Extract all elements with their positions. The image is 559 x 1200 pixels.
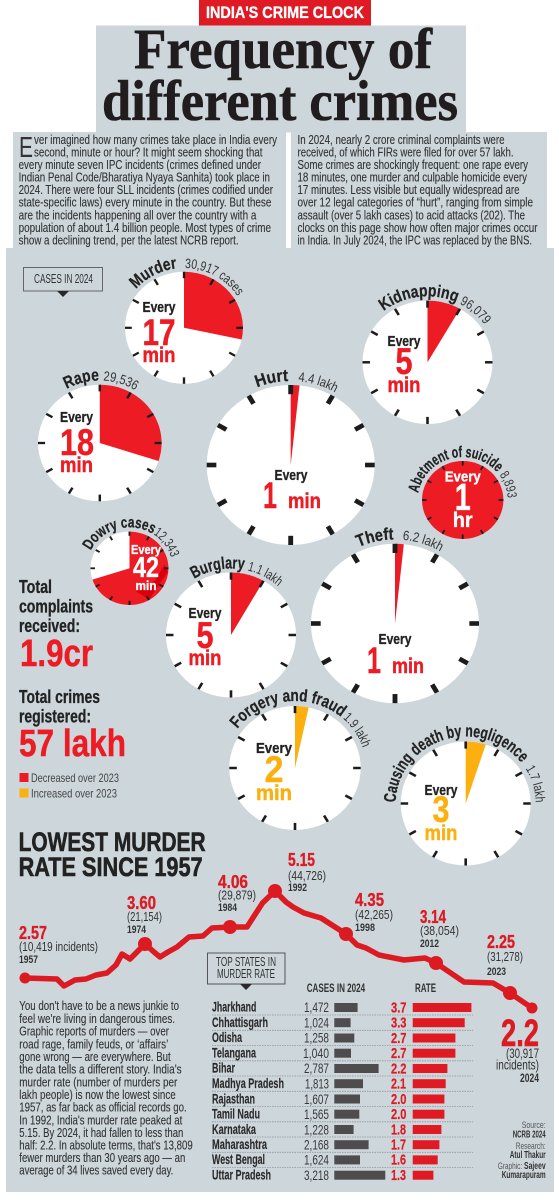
clock: forgery and fraud: Forgery and fraud [228, 689, 348, 728]
data label: 1992: 1992 [288, 882, 307, 894]
clock: causing death by negligence: Every [424, 782, 458, 799]
stat: total crimes registered: 57 lakh [19, 723, 126, 765]
legend [20, 771, 119, 800]
credits: Research: [516, 1141, 546, 1152]
row: Madhya Pradesh: 2.1 [391, 1076, 406, 1092]
clock: forgery and fraud: 1.9 lakh [343, 713, 370, 748]
clock: kidnapping: 96,079 [460, 296, 491, 324]
intro text left: E [19, 132, 33, 164]
row: Maharashtra: 1.7 [391, 1136, 406, 1154]
row: Madhya Pradesh [212, 1076, 446, 1092]
clock: dowry cases: Dowry cases [82, 518, 156, 550]
text block: murder rate story: Graphic reports of murders — over [19, 1024, 169, 1038]
legend: Decreased over 2023 [31, 771, 119, 785]
row: West Bengal [212, 1152, 438, 1169]
clock: kidnapping: min [388, 374, 420, 397]
clock: forgery and fraud: Every [256, 740, 293, 757]
title: Frequency of [134, 18, 433, 81]
intro text left: ver imagined how many crimes take place in India every [34, 132, 277, 147]
data label: 1974: 3.60 [127, 893, 156, 913]
clock: rape: 18 [60, 422, 94, 463]
text block: murder rate story: feel we're living in dangerous times. [19, 1011, 175, 1026]
intro text left: every minute seven IPC incidents (crimes defined under [19, 157, 262, 172]
row: Tamil Nadu [212, 1106, 444, 1123]
text block: murder rate story: road rage, family feuds, or ‘affairs’ [19, 1036, 168, 1051]
clock: theft: min [392, 655, 424, 678]
clock: burglary: min [188, 647, 222, 670]
clock: dowry cases: 12,343 [154, 528, 180, 556]
row: West Bengal: West Bengal [212, 1152, 265, 1167]
row: Rajasthan [212, 1091, 444, 1108]
data label: 1974: (21,154) [127, 910, 162, 924]
row: Rajasthan: 2.0 [391, 1091, 406, 1108]
clock: rape: Every [60, 409, 94, 426]
clock: kidnapping: Kidnapping [378, 284, 459, 311]
clock: forgery and fraud: min [256, 782, 292, 805]
intro text right [291, 132, 547, 248]
heading: lowest murder rate [19, 827, 206, 882]
row: West Bengal: 1,624 [304, 1153, 329, 1168]
callout: top states in murder rate: TOP STATES IN [216, 955, 276, 969]
row: Telangana: 2.7 [391, 1045, 406, 1062]
intro text left: second, minute or hour? It might seem shocking that [34, 144, 263, 160]
data label: 2024 [496, 1013, 539, 1085]
data label: 1992: 5.15 [288, 850, 315, 870]
row: Maharashtra [212, 1136, 439, 1154]
intro text left: are the incidents happening all over the country with a [19, 207, 257, 222]
clock: burglary: 5 [196, 615, 214, 656]
data label: 1998: 4.35 [355, 890, 384, 910]
clock: forgery and fraud: 2 [264, 749, 284, 790]
row: Karnataka: 1,228 [304, 1122, 329, 1137]
column headers: CASES IN 2024 [307, 981, 365, 995]
clock: causing death by negligence: 3 [432, 789, 450, 830]
clock: causing death by negligence: min [424, 822, 458, 845]
callout: top states in murder rate: MURDER RATE [217, 967, 275, 981]
text block: murder rate story: You don't have to be a news junkie to [19, 998, 179, 1013]
data label: 2012: (38,054) [420, 924, 459, 938]
clock: dowry cases: Every [131, 543, 161, 557]
text block: murder rate story: half: 2.2. In absolute terms, that's 13,809 [19, 1138, 193, 1152]
data label: 1974 [127, 893, 162, 936]
clock: dowry cases [82, 518, 180, 605]
clock: forgery and fraud [228, 689, 370, 830]
clock: theft: Theft [354, 527, 394, 546]
data label: 2023: (31,278) [487, 950, 523, 964]
clock: abetment of suicide [408, 446, 517, 539]
title [96, 18, 466, 133]
text block: murder rate story: murder rate (number of murders per [19, 1074, 178, 1089]
row: Uttar Pradesh: 3,218 [304, 1168, 329, 1183]
clock: causing death by negligence [384, 726, 546, 866]
clock: burglary: Burglary [189, 556, 246, 578]
data label: 2023 [487, 932, 523, 978]
row: Bihar [212, 1060, 447, 1077]
text block: murder rate story: 1957, as far back as official records go. [19, 1100, 187, 1115]
data label: 1992: (44,726) [288, 869, 326, 883]
data label: 2023: 2.25 [487, 932, 515, 952]
clock: hurt: min [288, 490, 321, 513]
data label: 1992 [288, 850, 326, 894]
callout: cases in 2024 [24, 268, 102, 297]
intro text left: population of about 1.4 billion people. Most types of crime [19, 220, 271, 235]
clock: burglary [166, 556, 296, 698]
data label: 1957: 1957 [19, 954, 38, 966]
clock: dowry cases: min [136, 578, 157, 593]
clock: theft [311, 527, 479, 704]
intro text left: Indian Penal Code/Bharatiya Nyaya Sanhita) took place in [19, 170, 270, 184]
data label: 1984: (29,879) [218, 888, 256, 902]
column headers: RATE [415, 981, 436, 995]
clock: murder: Murder [128, 259, 176, 288]
row: Karnataka: 1.8 [391, 1121, 406, 1138]
clock: murder [125, 258, 243, 384]
clock: abetment of suicide: 8,893 [500, 471, 517, 498]
heading: lowest murder rate: LOWEST MURDER [19, 827, 206, 857]
clock: causing death by negligence: Causing death by negligence [384, 726, 527, 802]
row: Uttar Pradesh [212, 1167, 433, 1184]
data label: 2012 [420, 907, 459, 950]
row: Jharkhand: Jharkhand [212, 1000, 256, 1014]
row: Karnataka [212, 1121, 441, 1138]
clock: hurt [206, 370, 375, 545]
row: Odisha: 1,258 [304, 1031, 329, 1046]
row: Jharkhand: 3.7 [391, 999, 406, 1016]
clock: murder: Every [142, 299, 176, 316]
clock: abetment of suicide: hr [453, 509, 473, 532]
data label: 2024: 2.2 [501, 1013, 539, 1055]
row: Odisha: 2.7 [391, 1030, 406, 1047]
data label: 1998 [355, 890, 393, 934]
row: Madhya Pradesh: 1,813 [305, 1076, 329, 1092]
row: Odisha [212, 1030, 455, 1047]
intro text left: show a declining trend, per the latest NCRB report. [19, 232, 239, 248]
row: Telangana: 1,040 [303, 1046, 329, 1061]
credits: Source: [522, 1120, 546, 1131]
intro text left [13, 132, 286, 248]
row: Telangana: Telangana [212, 1046, 256, 1060]
row: Maharashtra: Maharashtra [212, 1137, 267, 1152]
clock: rape: 29,536 [104, 371, 138, 390]
text block: murder rate story: fewer murders than 30 years ago — an [19, 1150, 185, 1165]
row: Chhattisgarh: Chhattisgarh [212, 1015, 268, 1030]
panel: clocks and murder rate background [6, 248, 554, 1192]
clock: theft: 6.2 lakh [404, 530, 442, 552]
text block: murder rate story [19, 998, 193, 1178]
callout: cases in 2024: CASES IN 2024 [34, 272, 93, 286]
stat: total complaints received [19, 577, 93, 675]
row: Chhattisgarh: 1,024 [304, 1016, 329, 1030]
kicker: India's crime clock [199, 0, 371, 26]
stat: total crimes registered: registered: [19, 706, 91, 726]
data label: 1957 [19, 923, 98, 966]
data label: 1984 [218, 872, 256, 914]
stat: total crimes registered: Total crimes [19, 687, 100, 707]
data label: 1998: (42,265) [355, 908, 393, 922]
line chart: murder rate [20, 884, 538, 1014]
stat: total complaints received: complaints [19, 596, 93, 616]
row: Tamil Nadu: Tamil Nadu [212, 1106, 260, 1122]
stat: total complaints received: Total [19, 577, 52, 597]
clock: abetment of suicide: Every [445, 469, 481, 486]
data label: 1957: 2.57 [19, 923, 47, 943]
table: top states [212, 981, 473, 1184]
heading: lowest murder rate: RATE SINCE 1957 [19, 852, 203, 882]
row: Tamil Nadu: 1,565 [304, 1107, 329, 1122]
text block: murder rate story: 5.15. By 2024, it had fallen to less than [19, 1125, 183, 1140]
row: Karnataka: Karnataka [212, 1122, 256, 1137]
row: Jharkhand: 1,472 [304, 1000, 329, 1015]
data label: 1998: 1998 [355, 922, 375, 934]
data label: 1957: (10,419 incidents) [19, 940, 98, 954]
row: Jharkhand [212, 999, 471, 1016]
clock: rape: Rape [62, 371, 99, 389]
clock: abetment of suicide: Abetment of suicide [408, 446, 502, 493]
clock: kidnapping: 5 [396, 341, 412, 382]
row: Bihar: 2.2 [391, 1060, 406, 1077]
clock: burglary: 1.1 lakh [248, 562, 282, 586]
stat: total crimes registered [19, 687, 126, 765]
clock: rape: min [60, 454, 93, 477]
text block: murder rate story: the data tells a different story. India's [19, 1062, 182, 1077]
kicker: India's crime clock: INDIA'S CRIME CLOCK [206, 4, 364, 22]
text block: murder rate story: lakh people) is now the lowest since [19, 1087, 176, 1102]
text block: murder rate story: gone wrong — are everywhere. But [19, 1049, 171, 1064]
data label: 1984: 4.06 [218, 872, 248, 892]
clock: hurt: 1 [263, 475, 277, 516]
clock: hurt: 4.4 lakh [298, 372, 338, 392]
row: Uttar Pradesh: 1.3 [391, 1167, 406, 1184]
credits [498, 1120, 546, 1181]
callout: top states in murder rate [208, 953, 285, 990]
data label: 2024: incidents) [496, 1058, 539, 1072]
clock: causing death by negligence: 1.7 lakh [526, 766, 546, 802]
clock: dowry cases: 42 [133, 552, 159, 584]
row: Maharashtra: 2,168 [304, 1138, 329, 1152]
data label: 1984: 1984 [218, 902, 238, 914]
clock: murder: min [142, 344, 176, 367]
row: Uttar Pradesh: Uttar Pradesh [212, 1168, 271, 1182]
row: Bihar: Bihar [212, 1061, 235, 1076]
row: Tamil Nadu: 2.0 [391, 1106, 406, 1123]
clock: kidnapping: Every [388, 333, 421, 350]
text block: murder rate story: average of 34 lives saved every day. [19, 1163, 173, 1178]
legend: Increased over 2023 [31, 786, 117, 800]
intro text left: state-specific laws) every minute in the country. But these [19, 195, 271, 210]
clock: theft: 1 [367, 640, 381, 681]
text block: murder rate story: In 1992, India's murder rate peaked at [19, 1112, 183, 1127]
data label: 2024: (30,917 [506, 1046, 539, 1061]
column headers [307, 981, 436, 995]
stat: total complaints received: received: [19, 616, 80, 636]
clock: hurt: Hurt [254, 370, 288, 388]
row: Rajasthan: 1,607 [304, 1092, 329, 1107]
stat: total complaints received: 1.9cr [20, 633, 93, 675]
clock: kidnapping [362, 284, 492, 424]
data label: 2012: 3.14 [420, 907, 446, 927]
data label: 1974: 1974 [127, 924, 147, 936]
clock: murder: 17 [142, 312, 176, 353]
credits: Graphic: Sajeev [498, 1161, 546, 1172]
clock: abetment of suicide: 1 [455, 477, 471, 519]
row: Bihar: 2,787 [304, 1061, 329, 1076]
clock: burglary: Every [188, 605, 222, 622]
data label: 2024: 2024 [520, 1073, 539, 1085]
row: Chhattisgarh [212, 1014, 465, 1032]
clock: rape [38, 371, 162, 502]
clock: hurt: Every [274, 467, 308, 484]
row: West Bengal: 1.6 [391, 1152, 406, 1169]
row: Rajasthan: Rajasthan [212, 1091, 255, 1106]
row: Telangana [212, 1045, 455, 1062]
row: Chhattisgarh: 3.3 [391, 1014, 406, 1032]
intro text left: 2024. There were four SLL incidents (crimes codified under [19, 182, 273, 197]
title: different crimes [102, 70, 458, 133]
row: Madhya Pradesh: Madhya Pradesh [212, 1076, 284, 1091]
data label: 2023: 2023 [487, 966, 506, 978]
data label: 2012: 2012 [420, 938, 439, 950]
row: Odisha: Odisha [212, 1030, 242, 1045]
clock: murder: 30,917 cases [185, 258, 242, 296]
clock: theft: Every [378, 631, 412, 648]
